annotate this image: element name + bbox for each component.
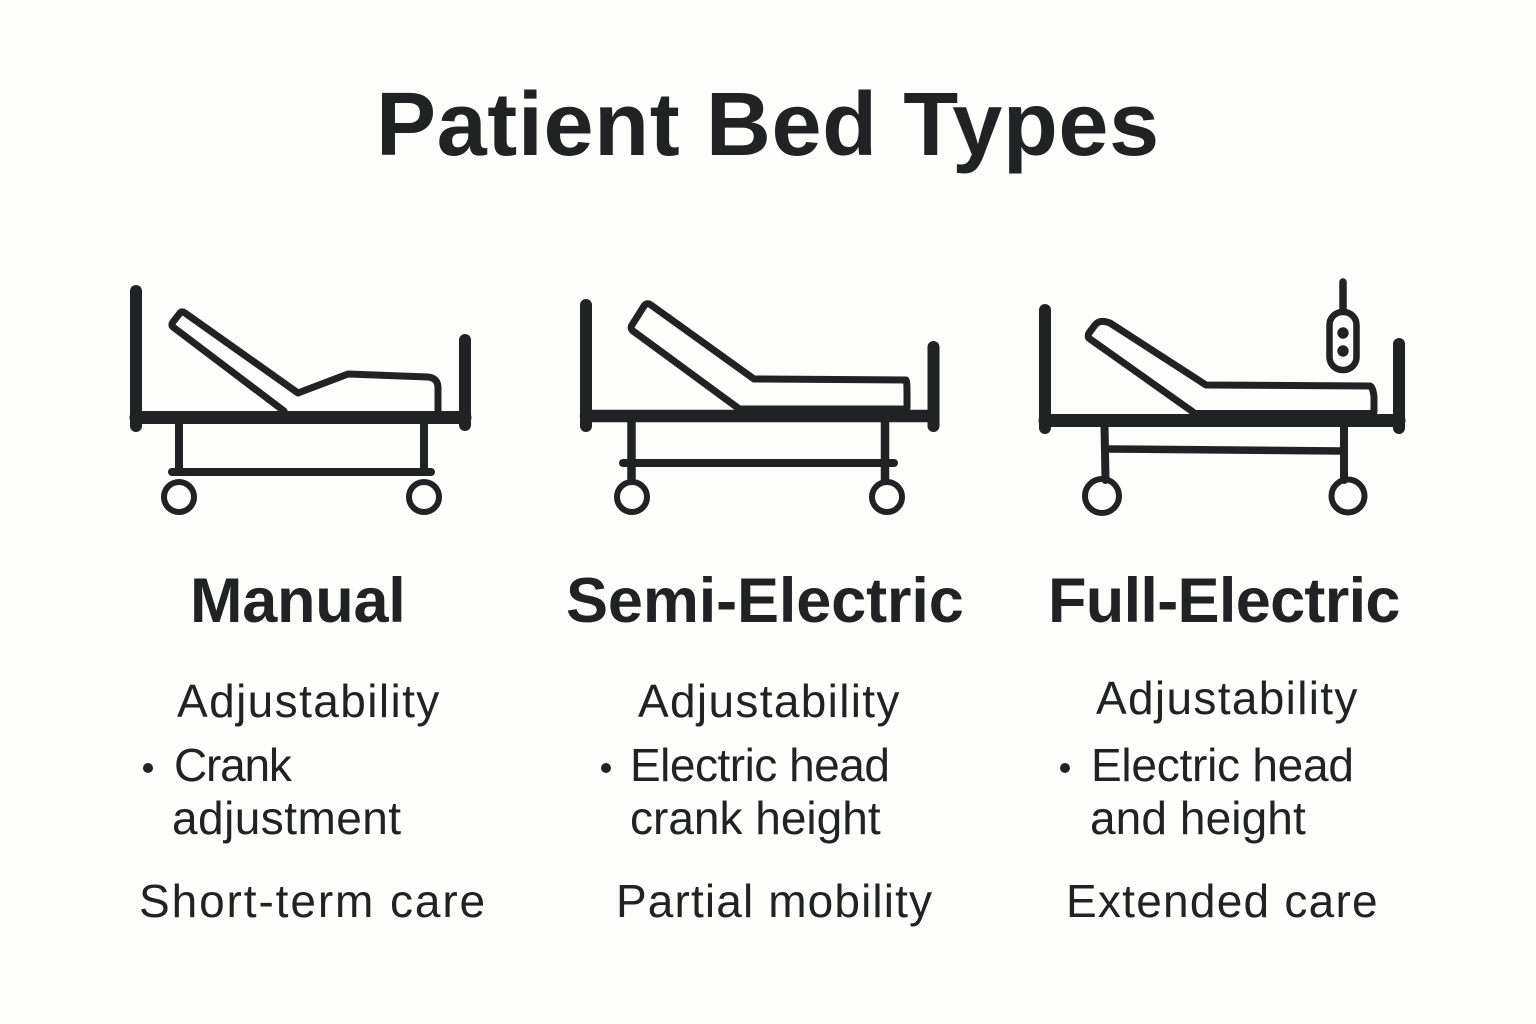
text: crank height: crank height	[630, 792, 881, 844]
text: partial mobility: Partial mobility	[616, 875, 933, 927]
text: and height: and height	[1090, 792, 1306, 844]
text: electric head, full-electric: Electric head	[1091, 739, 1354, 791]
heading: full-electric: Full-Electric	[1048, 566, 1400, 636]
heading: semi-electric: Semi-Electric	[566, 566, 964, 636]
text: short-term care: Short-term care	[139, 875, 487, 927]
icon: bed remote	[1330, 282, 1356, 370]
heading: manual: Manual	[190, 566, 406, 636]
text: extended care: Extended care	[1066, 875, 1379, 927]
title: Patient Bed Types	[376, 75, 1160, 175]
text: adjustment: adjustment	[172, 792, 402, 844]
label: adjustability manual: Adjustability	[177, 675, 441, 727]
text: electric head, semi-electric: Electric head	[630, 739, 889, 791]
icon: full-electric bed	[1038, 278, 1406, 516]
label: adjustability semi-electric: Adjustability	[638, 675, 901, 727]
label: adjustability full-electric: Adjustability	[1096, 672, 1359, 724]
icon: manual bed	[130, 285, 472, 515]
bullet: semi-electric	[601, 763, 611, 773]
bullet: full-electric	[1060, 763, 1070, 773]
bullet: manual	[143, 763, 153, 773]
icon: semi-electric bed	[580, 299, 940, 515]
text: crank: Crank	[174, 739, 291, 791]
